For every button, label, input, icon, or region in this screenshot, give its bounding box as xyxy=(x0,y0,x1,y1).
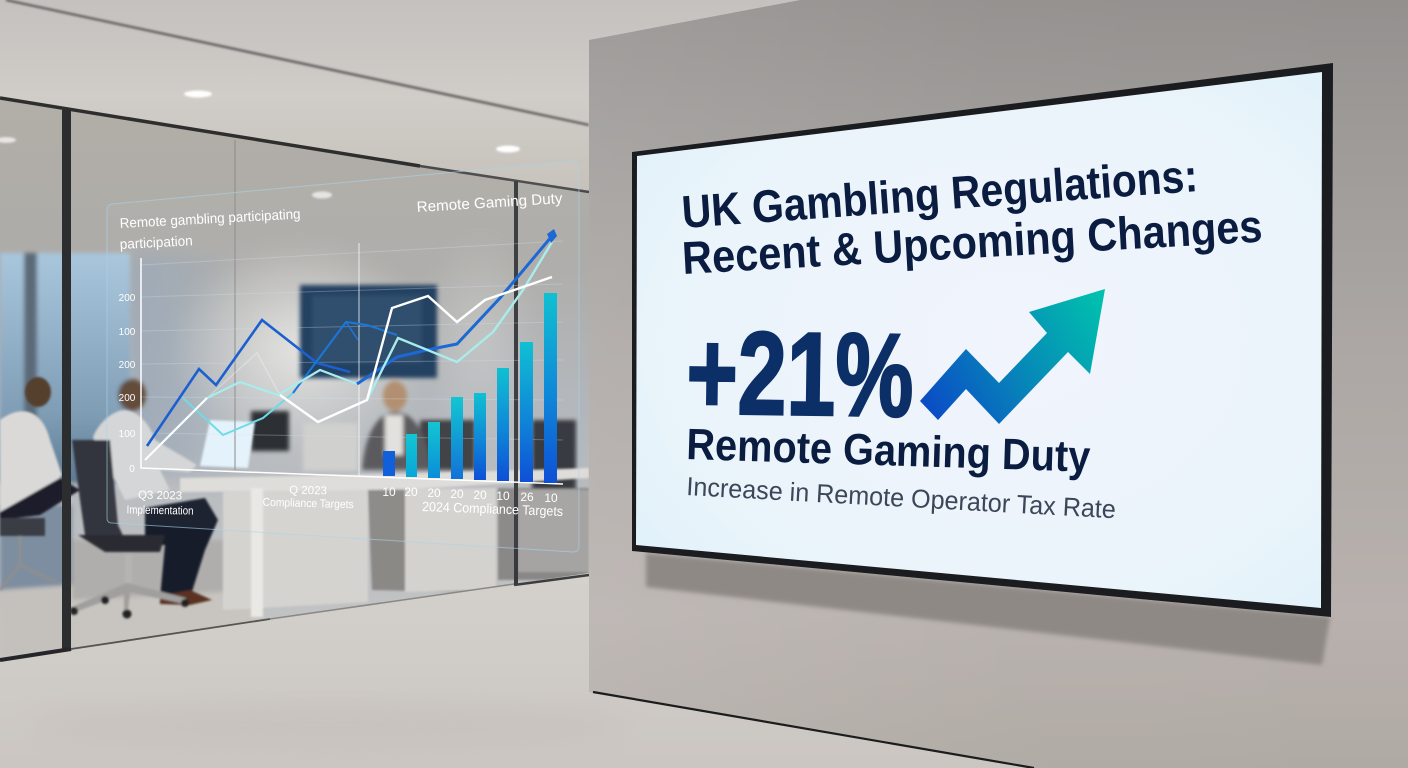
y axis labels: 200 xyxy=(119,393,136,404)
glass partition frame xyxy=(0,98,589,660)
y axis labels: 0 xyxy=(129,464,135,475)
x axis labels right: 20 xyxy=(450,487,464,501)
bar chart xyxy=(383,293,557,483)
panel heading left: Remote gambling participating xyxy=(119,206,301,231)
interior floor xyxy=(0,505,72,590)
x axis labels right: 26 xyxy=(520,490,534,504)
x axis labels left: Implementation xyxy=(126,504,194,518)
x axis labels right: 20 xyxy=(404,485,418,499)
ceiling lights xyxy=(0,90,520,198)
big number: +21% xyxy=(686,307,914,442)
window xyxy=(0,253,130,483)
person left xyxy=(25,377,51,407)
y axis labels xyxy=(119,293,136,475)
x axis caption: 2024 Compliance Targets xyxy=(422,499,564,519)
person centre trousers xyxy=(145,498,218,598)
display screen xyxy=(632,63,1333,617)
desk xyxy=(180,468,589,492)
y axis labels: 200 xyxy=(119,293,136,304)
line series xyxy=(145,229,557,460)
wall screen xyxy=(300,285,437,378)
panel outline xyxy=(107,161,579,552)
laptops xyxy=(303,423,358,471)
y axis labels: 100 xyxy=(119,429,136,440)
title: UK Gambling Regulations: xyxy=(680,149,1199,238)
panel heading left: participation xyxy=(119,232,193,252)
screen surface xyxy=(636,72,1322,608)
x axis labels right: 10 xyxy=(544,491,558,505)
wall shadow of screen xyxy=(646,553,1330,665)
x axis labels left: Compliance Targets xyxy=(262,497,354,511)
grid lines xyxy=(141,241,563,440)
x axis labels left: Q3 2023 xyxy=(138,490,182,502)
subheading: Remote Gaming Duty xyxy=(686,420,1092,482)
wall xyxy=(589,0,1408,768)
panel heading right: Remote Gaming Duty xyxy=(416,190,563,216)
ceiling xyxy=(0,0,800,192)
y axis labels: 200 xyxy=(119,360,136,371)
chair back xyxy=(72,440,125,540)
x axis labels left xyxy=(126,485,354,518)
icon: rising arrow xyxy=(920,289,1105,424)
x axis labels right: 10 xyxy=(382,485,396,499)
monitors xyxy=(251,411,289,451)
caption: Increase in Remote Operator Tax Rate xyxy=(686,471,1117,524)
title xyxy=(680,149,1264,284)
x axis labels left: Q 2023 xyxy=(289,485,327,497)
floor xyxy=(0,573,1034,768)
screen frame xyxy=(632,63,1333,617)
axes xyxy=(141,243,563,484)
pedestals xyxy=(368,488,496,593)
x axis labels right xyxy=(382,485,558,505)
x axis labels right: 20 xyxy=(473,488,487,502)
title: Recent & Upcoming Changes xyxy=(681,200,1264,284)
x axis labels right: 10 xyxy=(496,489,510,503)
back person xyxy=(118,379,146,411)
holographic chart panel xyxy=(107,161,579,552)
panel heading left xyxy=(119,206,301,252)
meeting room behind glass xyxy=(0,98,589,660)
person centre shirt xyxy=(93,410,197,500)
x axis labels right: 20 xyxy=(427,486,441,500)
person right xyxy=(383,381,407,411)
y axis labels: 100 xyxy=(119,327,136,338)
